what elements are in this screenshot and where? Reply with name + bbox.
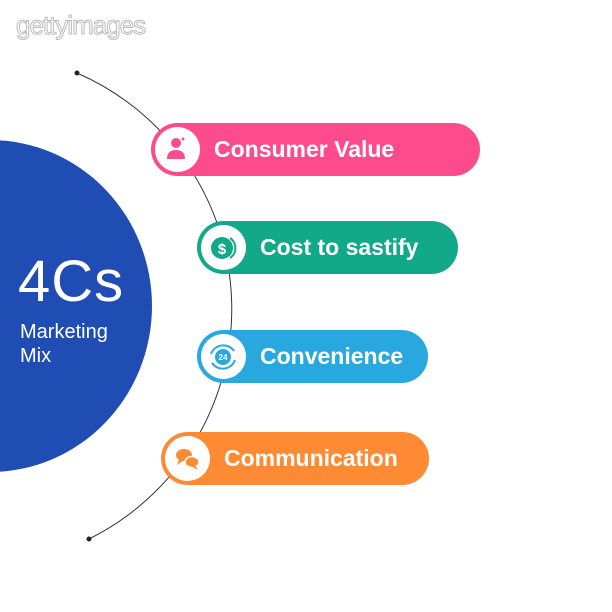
pill: Cost to sastify (197, 221, 458, 274)
pill: Communication: Communication (224, 445, 398, 471)
pill: Convenience (197, 330, 428, 383)
central circle: 4Cs Marketing Mix: 4Cs (18, 249, 124, 314)
pill: Consumer Value (151, 123, 480, 176)
watermark: gettyimages (16, 10, 145, 40)
icon: coin (201, 225, 246, 270)
central circle: 4Cs Marketing Mix: Mix (20, 345, 51, 367)
icon: 24 hours (201, 334, 246, 379)
icon: person (155, 127, 200, 172)
pill: Communication (161, 432, 429, 485)
icon: 24 hours: 24 (219, 353, 228, 362)
pill: Consumer Value: Consumer Value (214, 136, 394, 162)
icon: chat bubbles (165, 436, 210, 481)
central circle: 4Cs Marketing Mix: Marketing (20, 321, 108, 343)
central circle: 4Cs Marketing Mix (0, 140, 152, 472)
icon: coin: $ (218, 241, 227, 258)
pill: Cost to sastify: Cost to sastify (260, 234, 418, 260)
pill: Convenience: Convenience (260, 343, 403, 369)
